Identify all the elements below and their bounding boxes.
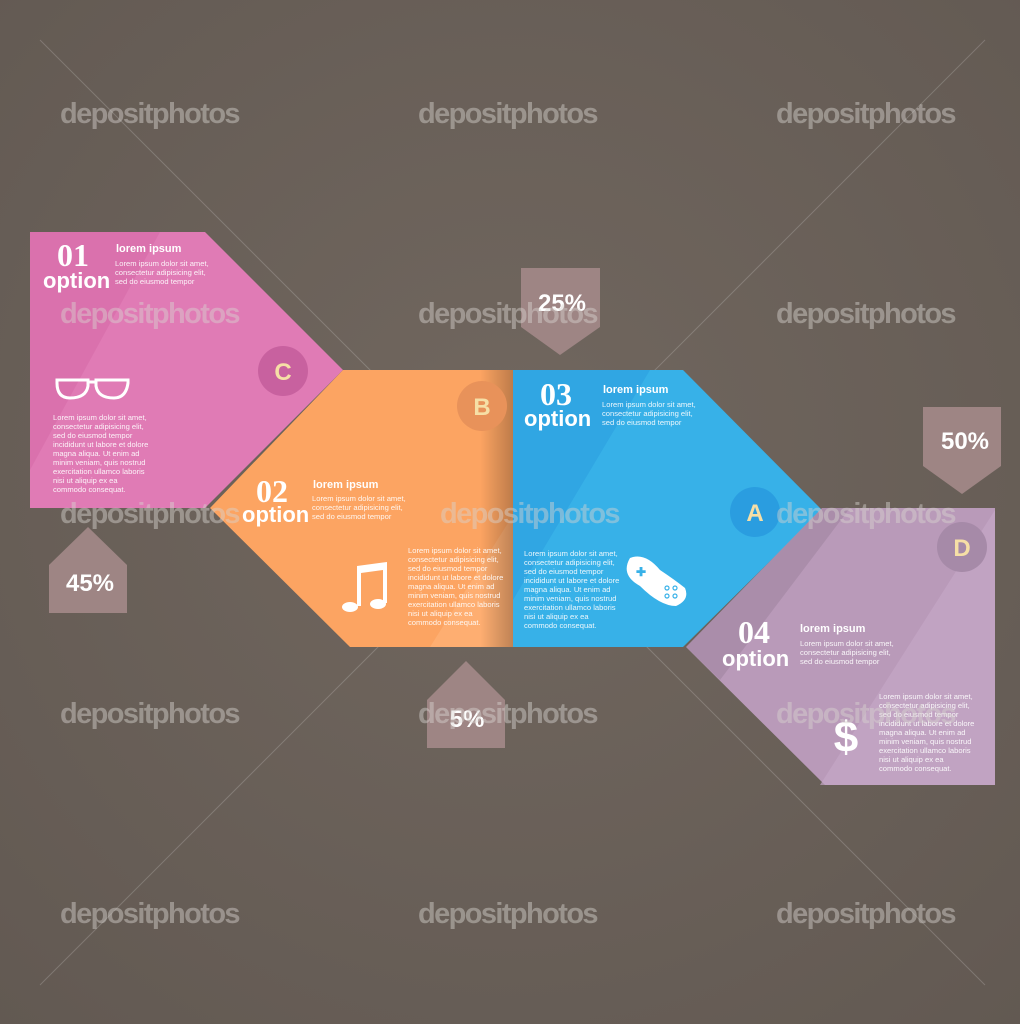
watermarks: depositphotos [776,698,955,730]
watermarks: depositphotos [418,698,597,730]
watermarks: depositphotos [60,898,239,930]
circle D [937,522,987,572]
icon: music note [342,562,387,612]
body text: Lorem ipsum dolor sit amet, [408,546,502,555]
heading 04 option: option [722,646,789,671]
circle A [730,487,780,537]
body text: exercitation ullamco laboris [879,746,971,755]
text block: consectetur adipisicing elit, [312,503,403,512]
text block: sed do eiusmod tempor [115,277,195,286]
body text: nisi ut aliquip ex ea [408,609,473,618]
body text: exercitation ullamco laboris [53,467,145,476]
icon: glasses [57,380,128,398]
body text: consectetur adipisicing elit, [408,555,499,564]
badge: 50% [923,407,1001,494]
watermarks: depositphotos [60,498,239,530]
body text: incididunt ut labore et dolore [879,719,974,728]
badge: 5% [427,661,505,748]
body text: exercitation ullamco laboris [408,600,500,609]
text block: lorem ipsum [603,384,669,396]
body text: nisi ut aliquip ex ea [879,755,944,764]
body text: minim veniam, quis nostrud [879,737,971,746]
watermarks: depositphotos [60,98,239,130]
text block: sed do eiusmod tempor [602,418,682,427]
icon: gamepad [627,556,686,606]
watermarks: depositphotos [418,298,597,330]
body text: commodo consequat. [879,764,952,773]
circle D: D [953,535,971,562]
body text: commodo consequat. [53,485,126,494]
circle B [457,381,507,431]
text block: consectetur adipisicing elit, [115,268,206,277]
watermarks: depositphotos [60,698,239,730]
text block [800,623,894,666]
text block: Lorem ipsum dolor sit amet, [602,400,696,409]
body text: minim veniam, quis nostrud [408,591,500,600]
badge: 45% [49,527,127,613]
body text: magna aliqua. Ut enim ad [53,449,140,458]
body text: incididunt ut labore et dolore [53,440,148,449]
badge: 50%: 50% [941,428,989,455]
text block: lorem ipsum [313,479,379,491]
badge: 25%: 25% [538,290,586,317]
text block: sed do eiusmod tempor [312,512,392,521]
circle C [258,346,308,396]
text block [312,479,406,521]
heading 01 option: 01 [57,237,89,273]
watermarks: depositphotos [776,898,955,930]
body text: sed do eiusmod tempor [524,567,604,576]
text block: Lorem ipsum dolor sit amet, [115,259,209,268]
icon: gamepad: ✚ [636,565,646,579]
text block [115,243,209,286]
watermarks: depositphotos [776,298,955,330]
circle B: B [473,394,491,421]
body text: commodo consequat. [408,618,481,627]
watermarks: depositphotos [418,98,597,130]
text block [602,384,696,427]
body text: commodo consequat. [524,621,597,630]
panel: 04 purple [686,508,995,785]
body text [524,549,619,630]
body text: exercitation ullamco laboris [524,603,616,612]
heading 01 option: option [43,268,110,293]
body text: Lorem ipsum dolor sit amet, [524,549,618,558]
body text: sed do eiusmod tempor [879,710,959,719]
watermarks: depositphotos [418,898,597,930]
heading 02 option [242,473,309,527]
body text: consectetur adipisicing elit, [879,701,970,710]
body text: incididunt ut labore et dolore [408,573,503,582]
heading 04 option [722,614,789,671]
watermarks [60,98,955,930]
watermarks: depositphotos [776,98,955,130]
icon: dollar: $ [834,713,858,762]
body text: magna aliqua. Ut enim ad [524,585,611,594]
body text: consectetur adipisicing elit, [53,422,144,431]
text block: sed do eiusmod tempor [800,657,880,666]
text block: lorem ipsum [116,243,182,255]
body text: sed do eiusmod tempor [408,564,488,573]
text block: lorem ipsum [800,623,866,635]
watermarks: depositphotos [440,498,619,530]
body text: Lorem ipsum dolor sit amet, [53,413,147,422]
circle C: C [274,359,292,386]
heading 04 option: 04 [738,614,770,650]
heading 02 option: option [242,502,309,527]
text block: consectetur adipisicing elit, [602,409,693,418]
heading 03 option: option [524,406,591,431]
text block: Lorem ipsum dolor sit amet, [800,639,894,648]
panel: 01 pink [30,232,343,508]
heading 01 option [43,237,110,293]
panel: 03 blue [513,370,822,647]
body text: magna aliqua. Ut enim ad [879,728,966,737]
body text: consectetur adipisicing elit, [524,558,615,567]
badge: 25% [521,268,600,355]
body text: incididunt ut labore et dolore [524,576,619,585]
body text [408,546,503,627]
body text: nisi ut aliquip ex ea [524,612,589,621]
body text [879,692,974,773]
body text: minim veniam, quis nostrud [53,458,145,467]
body text: magna aliqua. Ut enim ad [408,582,495,591]
body text: sed do eiusmod tempor [53,431,133,440]
circle A: A [746,500,764,527]
body text: nisi ut aliquip ex ea [53,476,118,485]
text block: Lorem ipsum dolor sit amet, [312,494,406,503]
badge: 45%: 45% [66,570,114,597]
heading 02 option: 02 [256,473,288,509]
heading 03 option [524,376,591,431]
heading 03 option: 03 [540,376,572,412]
watermarks: depositphotos [776,498,955,530]
watermarks: depositphotos [60,298,239,330]
text block: consectetur adipisicing elit, [800,648,891,657]
body text: minim veniam, quis nostrud [524,594,616,603]
body text [53,413,148,494]
badge: 5%: 5% [450,706,484,733]
body text: Lorem ipsum dolor sit amet, [879,692,973,701]
panel: 02 orange [210,370,513,647]
